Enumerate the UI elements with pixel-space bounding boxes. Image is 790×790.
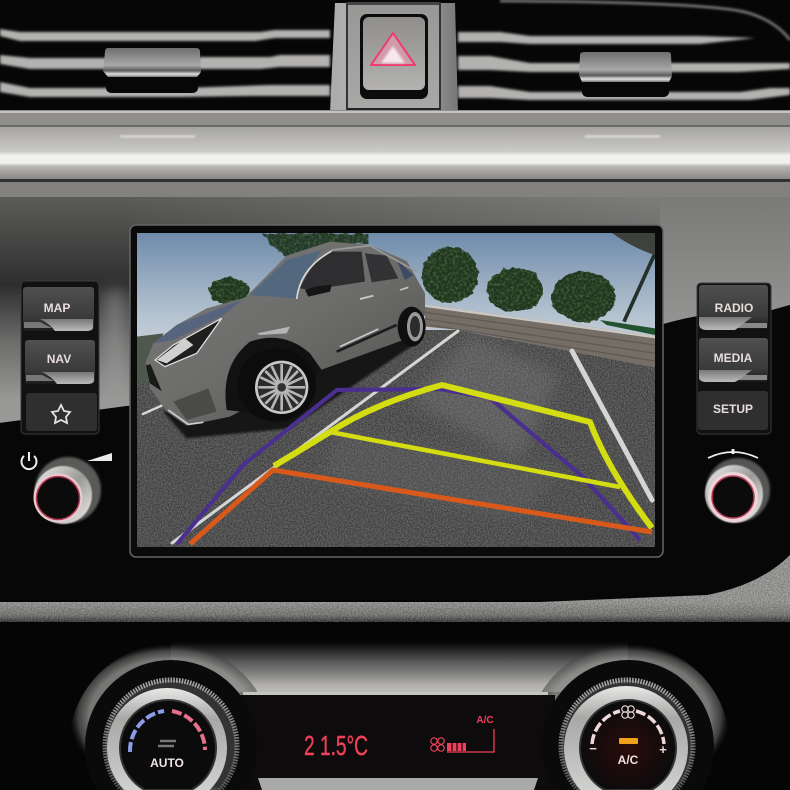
auto knob: AUTO — [150, 756, 184, 770]
button: SETUP: SETUP — [713, 402, 753, 416]
icon: hazard triangle — [371, 33, 415, 65]
button: favorites star — [26, 393, 97, 431]
door sill and handles — [337, 325, 397, 352]
yellow guide line outer — [274, 385, 652, 528]
icon: power — [22, 452, 37, 469]
ac label: A/C — [476, 715, 494, 726]
sky — [137, 233, 655, 352]
button: MAP: MAP — [44, 301, 70, 315]
mirror — [305, 285, 332, 297]
button: RADIO: RADIO — [715, 301, 753, 315]
trees and wall — [422, 232, 655, 368]
car body — [146, 242, 425, 426]
parking lines — [143, 331, 652, 543]
hood highlight — [153, 299, 243, 343]
ac knob: A/C — [618, 753, 639, 767]
ac knob: + — [659, 742, 667, 757]
vent slats right — [458, 32, 790, 100]
violet guide line — [177, 389, 640, 544]
button: RADIO — [699, 285, 768, 330]
rear camera screen — [137, 232, 655, 547]
center stack panel — [0, 197, 790, 600]
front wheel arch — [225, 338, 322, 415]
button: SETUP — [698, 391, 768, 430]
hazard switch — [330, 2, 458, 113]
lower trim band — [0, 555, 790, 622]
windows — [250, 246, 417, 299]
auto knob — [85, 660, 257, 790]
car — [146, 242, 426, 438]
grille and bumper — [148, 365, 157, 385]
headlight — [155, 318, 222, 367]
button: MEDIA — [699, 338, 768, 382]
fan scale arcs — [592, 711, 664, 744]
button: NAV: NAV — [47, 352, 71, 366]
air vents — [0, 0, 790, 112]
icon: fan — [431, 738, 444, 751]
tune knob — [705, 449, 770, 523]
icon: fan — [622, 706, 634, 718]
vent tab right — [579, 52, 672, 97]
vent tab left — [103, 48, 201, 93]
power knob — [22, 452, 112, 524]
button: NAV — [25, 340, 95, 384]
orange guide line — [190, 470, 652, 544]
icon: auto bars — [158, 741, 176, 746]
fan speed indicator — [431, 729, 494, 752]
button: MAP — [23, 287, 94, 331]
icon: volume wedge — [87, 453, 112, 461]
temperature readout: 2 1.5°C — [304, 730, 368, 761]
silver trim bands — [0, 110, 790, 197]
silver fascia — [69, 642, 730, 790]
wheel: rear — [398, 307, 426, 347]
icon: tune arc — [708, 449, 758, 458]
car shadow — [163, 332, 423, 438]
grass — [600, 320, 655, 335]
pole and foliage — [610, 232, 655, 322]
vent slats left — [0, 29, 330, 97]
brick wall — [425, 304, 655, 368]
right button group — [697, 283, 771, 434]
climate control panel — [69, 642, 730, 790]
screen bezel — [130, 225, 663, 557]
ground — [137, 325, 655, 547]
temperature scale arcs — [130, 711, 205, 752]
ac indicator — [619, 738, 638, 744]
lcd display — [240, 692, 555, 790]
parking guide lines — [177, 385, 652, 544]
tree row — [422, 247, 615, 322]
minus and plus: − — [589, 741, 597, 756]
left tree and background foliage — [137, 233, 368, 382]
ac knob — [542, 660, 714, 790]
yellow guide line inner — [330, 432, 620, 487]
left button group — [21, 281, 99, 434]
wheel: front — [252, 360, 316, 422]
button: MEDIA: MEDIA — [714, 351, 753, 365]
